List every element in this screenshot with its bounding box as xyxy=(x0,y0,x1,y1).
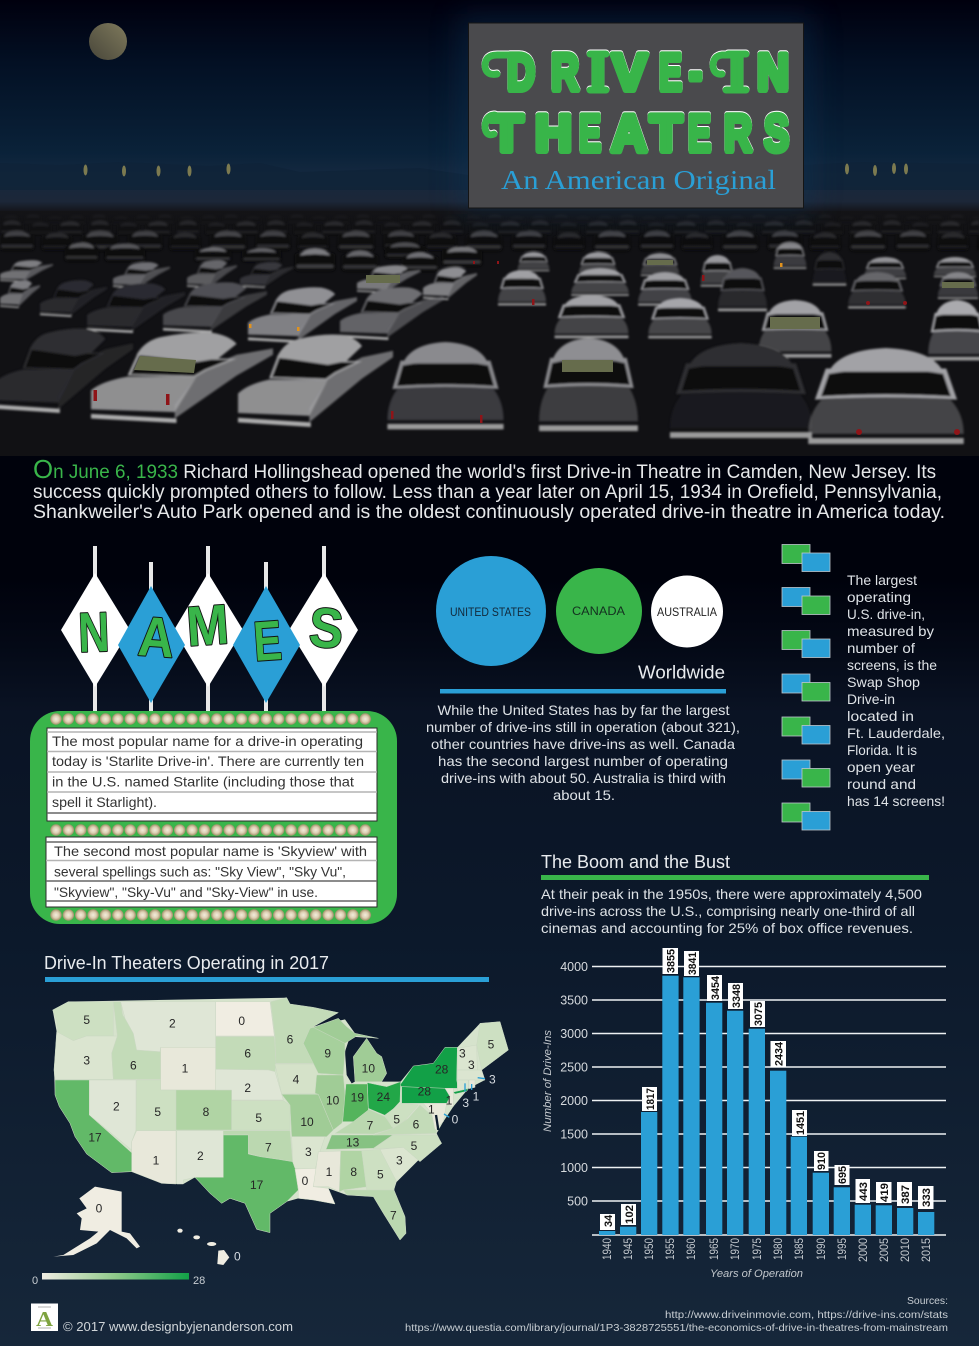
title: drive-in theaters: S xyxy=(764,105,789,163)
bars xyxy=(599,976,934,1235)
x axis labels xyxy=(602,1238,933,1262)
footer logo: A xyxy=(36,1307,54,1331)
green marquee panel xyxy=(30,711,397,924)
state value labels: 6 xyxy=(413,1117,420,1131)
state value labels: 24 xyxy=(377,1090,390,1104)
state value labels: 6 xyxy=(287,1032,294,1046)
footer sources: http://www.driveinmovie.com, https://drive-ins.com/stats xyxy=(665,1309,948,1321)
value labels: 333 xyxy=(921,1188,933,1207)
text box: most popular name: in the U.S. named Starlite (including those that xyxy=(52,774,354,790)
largest drive-in text: Drive-in xyxy=(847,691,895,707)
largest drive-in text: open year xyxy=(847,759,915,775)
title: drive-in theaters: V xyxy=(612,44,647,102)
intro paragraph: success quickly prompted others to follow. Less than a year later on April 15, 1934 in Orefield, Pennsylvania, xyxy=(33,482,942,503)
heading: names: E xyxy=(251,608,284,673)
state value labels: 0 xyxy=(238,1014,245,1028)
largest drive-in text: Florida. It is xyxy=(847,742,917,758)
title screen sign xyxy=(458,14,814,214)
state shapes xyxy=(53,998,508,1257)
state value labels: 5 xyxy=(488,1038,495,1052)
heading: drive-in theaters operating in 2017: Drive-In Theaters Operating in 2017 xyxy=(44,953,329,973)
hawaii islands xyxy=(177,1229,229,1265)
rows of parked cars xyxy=(0,214,979,444)
icon: moon xyxy=(89,23,127,60)
largest drive-in text: U.S. drive-in, xyxy=(847,606,925,622)
state value labels: 0 xyxy=(452,1112,459,1126)
value labels: 419 xyxy=(879,1183,891,1202)
x axis labels: 2000 xyxy=(858,1238,870,1262)
leader lines xyxy=(444,1078,485,1117)
title: drive-in theaters: H xyxy=(535,105,572,163)
intro paragraph: On June 6, 1933 Richard Hollingshead opened the world's first Drive-in Theatre in Camden, New Jersey. Its xyxy=(33,454,936,484)
x axis labels: 1950 xyxy=(644,1238,656,1260)
state value labels: 2 xyxy=(244,1081,251,1095)
title: drive-in theaters: D xyxy=(507,44,535,102)
text box: second most popular name: The second most popular name is 'Skyview' with xyxy=(54,843,367,859)
state value labels: 28 xyxy=(435,1062,449,1076)
marquee bulbs xyxy=(50,712,372,922)
state value labels: 0 xyxy=(96,1202,103,1216)
diamonds xyxy=(61,573,358,703)
value labels: 102 xyxy=(624,1205,636,1224)
value labels: 3841 xyxy=(687,952,699,975)
title: drive-in theaters: T xyxy=(490,105,523,163)
y axis labels: 500 xyxy=(567,1194,588,1208)
state value labels: 2 xyxy=(113,1099,120,1113)
title: drive-in theaters: I xyxy=(591,44,605,102)
state value labels: 10 xyxy=(362,1062,375,1076)
y axis labels: 3500 xyxy=(560,994,588,1008)
state value labels: 6 xyxy=(130,1058,137,1072)
worldwide paragraph: number of drive-ins still in operation (about 321), xyxy=(426,719,740,735)
value labels: 3348 xyxy=(731,984,743,1008)
value labels: 1817 xyxy=(645,1088,657,1110)
blue rule xyxy=(440,689,726,694)
contiguous US silhouette xyxy=(53,998,508,1240)
map legend xyxy=(32,1273,205,1287)
y axis labels: 2000 xyxy=(560,1094,588,1108)
boom paragraph xyxy=(541,886,922,936)
value labels: 1451 xyxy=(795,1111,807,1135)
largest drive-in text: Ft. Lauderdale, xyxy=(847,725,945,741)
map legend: 28 xyxy=(193,1275,205,1287)
red tail lights xyxy=(94,261,960,435)
state value labels: 3 xyxy=(462,1096,469,1110)
largest drive-in text: The largest xyxy=(847,572,917,588)
state value labels: 1 xyxy=(428,1103,435,1117)
intro paragraph: Shankweiler's Auto Park opened and is the oldest continuously operated drive-in theatre in America today. xyxy=(33,502,945,523)
heading: names: M xyxy=(184,592,231,658)
state value labels: 7 xyxy=(367,1118,374,1132)
title: drive-in theaters: A xyxy=(611,105,647,163)
state value labels: 3 xyxy=(305,1145,312,1159)
bar chart: drive-ins by year xyxy=(542,948,946,1280)
state value labels: 5 xyxy=(83,1013,90,1027)
state value labels: 0 xyxy=(302,1174,309,1188)
title: drive-in theaters: R xyxy=(724,105,752,163)
icon column: film screens xyxy=(782,544,830,830)
lit green windows xyxy=(134,260,974,373)
x axis labels: 1985 xyxy=(794,1238,806,1260)
state value labels: 2 xyxy=(197,1149,204,1163)
circle: australia: AUSTRALIA xyxy=(657,605,717,619)
x axis labels: 1965 xyxy=(709,1238,721,1260)
circle: australia xyxy=(651,576,723,648)
worldwide paragraph: about 15. xyxy=(553,787,615,803)
largest drive-in text: has 14 screens! xyxy=(847,793,945,809)
green rule xyxy=(541,875,929,880)
x axis labels: 1990 xyxy=(816,1238,828,1260)
choropleth map of US drive-ins by state xyxy=(53,998,508,1265)
y axis labels: 4000 xyxy=(560,960,588,974)
x axis title: Years of Operation xyxy=(710,1268,803,1280)
title: drive-in theaters xyxy=(485,44,789,163)
x axis labels: 2015 xyxy=(921,1238,933,1262)
largest drive-in text: operating xyxy=(847,589,911,605)
state value labels: 5 xyxy=(255,1111,262,1125)
map section heading xyxy=(44,953,489,982)
worldwide paragraph: has the second largest number of operating xyxy=(438,753,728,769)
state value labels: 8 xyxy=(350,1165,357,1179)
title: drive-in theaters: N xyxy=(757,44,789,102)
title: drive-in theaters: E xyxy=(579,105,601,163)
title letter swashes xyxy=(485,54,746,135)
text box: most popular name xyxy=(47,728,377,821)
text box: second most popular name: "Skyview", "Sky-Vu" and "Sky-View" in use. xyxy=(54,884,318,900)
heading: the boom and the bust: The Boom and the Bust xyxy=(541,852,730,872)
state value labels xyxy=(83,1013,496,1264)
x axis labels: 1975 xyxy=(752,1238,764,1260)
state value labels: 5 xyxy=(154,1105,161,1119)
state value labels: 4 xyxy=(293,1073,300,1087)
y axis labels: 2500 xyxy=(560,1060,588,1074)
largest drive-in text: measured by xyxy=(847,623,934,639)
subtitle: An American Original xyxy=(501,165,776,195)
x axis labels: 1955 xyxy=(665,1238,677,1260)
text box: most popular name: today is 'Starlite Drive-in'. There are currently ten xyxy=(52,753,364,769)
value label boxes xyxy=(600,948,934,1230)
footer logo xyxy=(31,1304,58,1331)
state value labels: 3 xyxy=(396,1153,403,1167)
text box: second most popular name xyxy=(46,837,377,907)
state value labels: 3 xyxy=(489,1073,496,1087)
largest drive-in text: Swap Shop xyxy=(847,674,920,690)
largest drive-in text: round and xyxy=(847,776,916,792)
value labels: 387 xyxy=(900,1185,912,1204)
state value labels: 5 xyxy=(411,1139,418,1153)
x axis labels: 1945 xyxy=(623,1238,635,1260)
text box: most popular name: The most popular name for a drive-in operating xyxy=(52,733,363,749)
value labels: 2434 xyxy=(774,1041,786,1066)
heading: names: N xyxy=(77,600,110,664)
title: drive-in theaters: E xyxy=(659,44,682,102)
state value labels: 1 xyxy=(473,1089,480,1103)
value labels: 3855 xyxy=(666,949,678,973)
worldwide paragraph: other countries have drive-ins as well. Canada xyxy=(431,736,735,752)
names marquee sign xyxy=(30,546,397,924)
state value labels: 5 xyxy=(393,1113,400,1127)
title: drive-in theaters: T xyxy=(650,105,682,163)
circle: canada: CANADA xyxy=(572,604,625,618)
state value labels: 9 xyxy=(324,1047,331,1061)
title: drive-in theaters: R xyxy=(551,44,579,102)
value labels xyxy=(603,949,933,1227)
state value labels: 0 xyxy=(234,1250,241,1264)
footer copyright: © 2017 www.designbyjenanderson.com xyxy=(63,1319,293,1334)
state value labels: 10 xyxy=(300,1115,314,1129)
parking lot ground xyxy=(0,211,979,456)
heading: worldwide: Worldwide xyxy=(638,662,725,682)
value labels: 443 xyxy=(858,1182,870,1201)
sign poles xyxy=(93,546,326,712)
chesapeake bay xyxy=(436,1115,438,1130)
value labels: 3454 xyxy=(710,975,722,1000)
text box: second most popular name: several spellings such as: "Sky View", "Sky Vu", xyxy=(54,864,346,880)
blue rule xyxy=(45,977,489,982)
largest drive-in text xyxy=(847,572,945,809)
state value labels: 13 xyxy=(346,1135,360,1149)
heading: names xyxy=(77,592,345,673)
circle: united states: UNITED STATES xyxy=(450,605,531,619)
x axis labels: 2010 xyxy=(900,1238,912,1262)
y axis labels: 3000 xyxy=(560,1027,588,1041)
title: drive-in theaters: I xyxy=(730,44,744,102)
x axis labels: 1940 xyxy=(602,1238,614,1260)
boom paragraph: drive-ins across the U.S., comprising nearly one-third of all xyxy=(541,903,915,919)
state value labels: 1 xyxy=(446,1093,453,1107)
x axis labels: 2005 xyxy=(879,1238,891,1262)
value labels: 3075 xyxy=(753,1002,765,1026)
title: drive-in theaters: E xyxy=(688,105,711,163)
largest drive-in text: number of xyxy=(847,640,915,656)
screen glow xyxy=(458,14,814,214)
boom paragraph: At their peak in the 1950s, there were approximately 4,500 xyxy=(541,886,922,902)
boom and bust section header xyxy=(541,852,929,936)
state value labels: 17 xyxy=(250,1178,264,1192)
heading: names: S xyxy=(307,595,345,660)
largest drive-in text: screens, is the xyxy=(847,657,937,673)
worldwide paragraph: While the United States has by far the largest xyxy=(438,702,730,718)
worldwide section xyxy=(426,556,740,803)
intro paragraph xyxy=(33,454,945,523)
field lights xyxy=(84,163,908,176)
x axis labels: 1970 xyxy=(730,1238,742,1260)
y axis labels: 1500 xyxy=(560,1128,588,1142)
state value labels: 8 xyxy=(203,1105,210,1119)
hero photo: drive-in night scene with parked cars xyxy=(0,0,979,456)
heading: names: A xyxy=(136,604,176,669)
y axis labels: 1000 xyxy=(560,1161,588,1175)
y axis labels xyxy=(560,960,588,1208)
circle: united states xyxy=(436,556,546,666)
state value labels: 1 xyxy=(326,1165,333,1179)
state value labels: 19 xyxy=(351,1091,364,1105)
state value labels: 2 xyxy=(169,1017,176,1031)
x axis labels: 1980 xyxy=(773,1238,785,1260)
footer sources xyxy=(405,1295,948,1334)
worldwide paragraph: drive-ins with about 50. Australia is third with xyxy=(441,770,726,786)
value labels: 695 xyxy=(837,1166,849,1184)
value labels: 34 xyxy=(603,1214,615,1227)
orange lights xyxy=(249,263,782,331)
text box: most popular name: spell it Starlight). xyxy=(52,794,157,810)
circle: canada xyxy=(556,568,642,654)
x axis labels: 1995 xyxy=(837,1238,849,1260)
screen panel xyxy=(468,23,804,208)
state value labels: 5 xyxy=(377,1167,384,1181)
distant hills xyxy=(0,162,979,190)
value labels: 910 xyxy=(816,1152,828,1170)
footer sources: Sources: xyxy=(907,1295,948,1307)
state value labels: 3 xyxy=(459,1047,466,1061)
footer sources: https://www.questia.com/library/journal/1P3-3828725551/the-economics-of-drive-in-theatres-from-mainstream xyxy=(405,1322,948,1334)
y axis title: Number of Drive-Ins xyxy=(542,1029,554,1132)
night sky xyxy=(0,0,979,212)
boom paragraph: cinemas and accounting for 25% of box office revenues. xyxy=(541,920,913,936)
map legend: 0 xyxy=(32,1275,38,1287)
state value labels: 7 xyxy=(265,1140,272,1154)
x axis labels: 1960 xyxy=(686,1238,698,1260)
state value labels: 10 xyxy=(326,1094,340,1108)
state value labels: 3 xyxy=(83,1053,90,1067)
state value labels: 6 xyxy=(244,1047,251,1061)
state value labels: 28 xyxy=(418,1085,431,1099)
state value labels: 3 xyxy=(468,1058,475,1072)
state value labels: 17 xyxy=(88,1130,102,1144)
horizon fade xyxy=(0,211,979,247)
state value labels: 7 xyxy=(390,1209,397,1223)
state value labels: 1 xyxy=(153,1153,160,1167)
title: drive-in theaters: - xyxy=(689,44,702,102)
worldwide paragraph xyxy=(426,702,740,803)
largest drive-in text: located in xyxy=(847,708,914,724)
state value labels: 1 xyxy=(182,1061,189,1075)
